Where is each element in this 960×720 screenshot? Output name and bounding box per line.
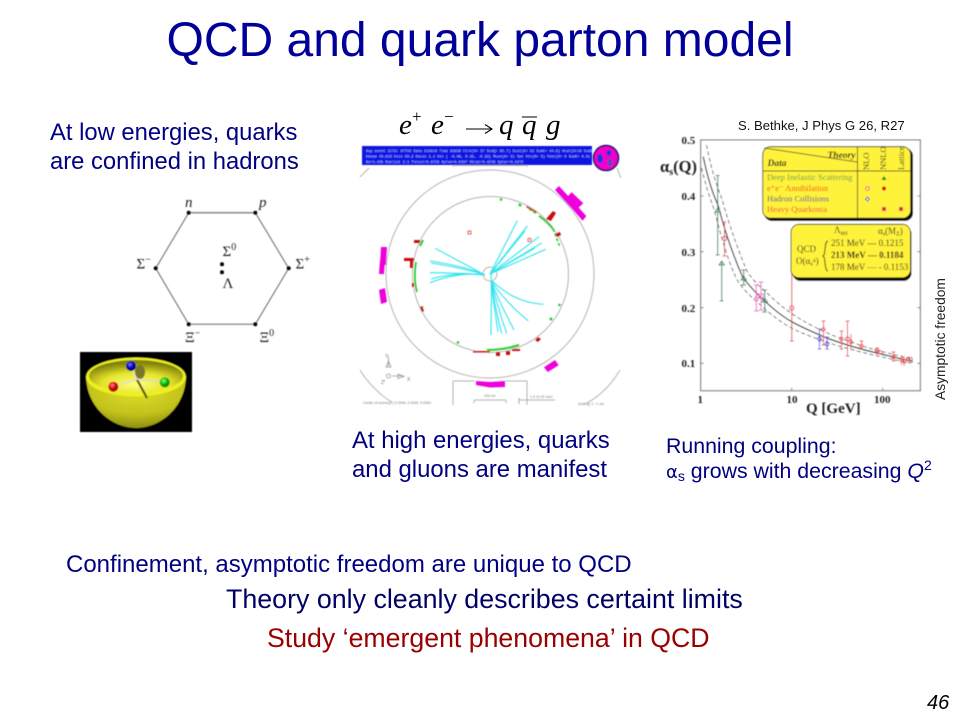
formula: e+ e- to q qbar g: + xyxy=(412,107,422,126)
chart: running coupling alpha_s(Q) xyxy=(660,135,920,417)
legend: QCD scale values: Λ xyxy=(834,225,841,235)
chart: collider event display: Scaling: 1 : 1 cm xyxy=(578,402,604,406)
formula: e+ e- to q qbar g xyxy=(399,107,560,141)
text: running coupling: α xyxy=(666,462,678,483)
event header bar: Ebeam 45.613 Evis 90.3 Emiss 1.1 Vtx ( -0.06, 0.15, -0.33) Muon(N= 0) Sec Vtx(N= 3) Fdet(N= 0 SumE= 0.0) xyxy=(366,154,590,160)
text: high energies: At high energies, quarks xyxy=(352,427,610,454)
page number: 46 xyxy=(927,692,950,714)
chart: collider event display: X xyxy=(407,377,411,383)
legend: QCD scale values: ) xyxy=(900,226,903,236)
chart: collider event display: 1 5 10 20 GeV xyxy=(530,395,553,399)
legend: data and theory table: NLO xyxy=(861,153,871,170)
stray cluster markers xyxy=(468,231,531,242)
title: QCD and quark parton model xyxy=(166,14,794,67)
legend: data and theory table: Hadron Collisions xyxy=(767,194,829,204)
legend: data and theory table: Theory xyxy=(828,151,856,161)
chart: collider event display: Z xyxy=(381,380,384,386)
diagram: baryon octet hexagon: Ξ xyxy=(185,330,195,346)
data points with error bars xyxy=(715,176,912,366)
legend: data and theory table: NNLO xyxy=(878,146,888,170)
x axis labels: 100 xyxy=(874,394,891,406)
text: running coupling xyxy=(666,434,932,484)
formula: e+ e- to q qbar g: q xyxy=(522,109,536,141)
chart: collider event display xyxy=(360,146,621,406)
formula: e+ e- to q qbar g: − xyxy=(444,107,454,126)
detector rings xyxy=(360,166,621,405)
diagram: baryon octet hexagon: Σ xyxy=(136,256,145,272)
legend: data and theory table: Data xyxy=(766,159,787,169)
text: high energies xyxy=(352,427,610,483)
legend: QCD scale values: ) xyxy=(816,256,819,266)
plot frame xyxy=(701,140,920,391)
diagram: baryon octet hexagon: n xyxy=(185,195,192,211)
diagram: baryon octet hexagon: 0 xyxy=(231,242,236,253)
diagram: baryon octet hexagon: 0 xyxy=(269,328,274,339)
inner hits green and red xyxy=(415,199,560,350)
formula: e+ e- to q qbar g: q xyxy=(499,109,514,141)
diagram: baryon octet hexagon: Λ xyxy=(222,276,234,292)
text: asymptotic freedom vertical label: Asymptotic freedom xyxy=(933,278,948,400)
tracks xyxy=(430,221,546,335)
text: low energies: are confined in hadrons xyxy=(50,148,299,175)
legend: data and theory table: Deep Inelastic Scattering xyxy=(767,172,853,182)
legend: QCD scale values: QCD xyxy=(797,244,817,254)
text: running coupling: 2 xyxy=(924,457,932,473)
y axis title: (Q) xyxy=(673,157,697,176)
legend: QCD scale values: MS xyxy=(841,232,848,237)
legend: data and theory table: Heavy Quarkonia xyxy=(767,204,827,214)
event header bar xyxy=(362,146,605,165)
event header bar: Aup event 2173: 67792 Date 910819 Time 93838 Ctrk(N= 37 SumQ= 65.7) Ecal(N= 55 SumE= 44.9) Hcal(N=19 SumE= 4.4) xyxy=(366,149,605,154)
diagram: baryon octet hexagon: − xyxy=(145,254,151,266)
x axis labels: 10 xyxy=(786,394,798,406)
y axis labels: 0.1 xyxy=(682,358,695,370)
y axis title: α xyxy=(660,157,669,176)
citation: S. Bethke, J Phys G 26, R27 xyxy=(738,118,905,133)
y axis labels: 0.2 xyxy=(682,303,696,315)
x axis labels: 1 xyxy=(698,394,703,406)
legend: QCD scale values: 4 xyxy=(813,258,816,264)
diagram: baryon octet hexagon: Σ xyxy=(222,244,231,260)
diagram: baryon octet hexagon: Ξ xyxy=(260,330,269,346)
y axis title: s xyxy=(669,167,673,178)
text: high energies: and gluons are manifest xyxy=(352,456,607,483)
legend: QCD scale values: s xyxy=(883,232,886,238)
legend: data and theory table: e⁺e⁻ Annihilation xyxy=(767,183,829,193)
legend: QCD scale values: 213 MeV — 0.1184 xyxy=(831,250,904,260)
diagram: baryon octet hexagon: + xyxy=(304,254,310,266)
detector logo xyxy=(594,146,618,170)
legend: QCD scale values: 251 MeV --- 0.1215 xyxy=(831,238,904,248)
x axis title: Q [GeV] xyxy=(806,401,861,417)
formula: e+ e- to q qbar g: g xyxy=(546,109,560,141)
x axis labels xyxy=(698,394,891,406)
legend: data and theory table xyxy=(763,146,913,221)
text: running coupling: s xyxy=(678,468,685,484)
legend: QCD scale values: s xyxy=(810,262,813,268)
diagram: baryon octet hexagon: p xyxy=(258,195,267,211)
chart: collider event display: Centre of screen(z.) 0.0000, 0.0000, 0.0000 xyxy=(363,401,431,405)
legend: QCD scale values: 178 MeV — - 0.1153 xyxy=(831,262,909,272)
text: running coupling: grows with decreasing xyxy=(685,459,907,483)
text: confinement statement: Confinement, asymptotic freedom are unique to QCD xyxy=(66,551,632,578)
legend: QCD scale values: α xyxy=(878,226,883,236)
text: emergent phenomena: Study ‘emergent phenomena’ in QCD xyxy=(267,623,710,653)
y axis labels xyxy=(682,135,696,370)
text: low energies: At low energies, quarks xyxy=(50,119,297,146)
axes legend xyxy=(384,356,555,404)
formula: e+ e- to q qbar g: e xyxy=(399,109,412,141)
calorimeter hits magenta xyxy=(379,186,586,388)
diagram: baryon octet hexagon: − xyxy=(195,328,201,339)
diagram: baryon octet hexagon xyxy=(136,195,310,346)
icon: yellow bag with three quarks xyxy=(80,352,192,432)
formula: e+ e- to q qbar g: e xyxy=(431,109,444,141)
event header bar: Bz=4.435 Runlist 1:1 Thrust=0.8756 Aplan=0.0397 Oblat=0.4246 Spher=0.3272 xyxy=(366,160,523,165)
text: running coupling: Running coupling: xyxy=(666,434,836,458)
legend: QCD scale values: Z xyxy=(896,232,900,238)
chart: collider event display: Y xyxy=(385,354,389,360)
y axis labels: 0.3 xyxy=(682,247,696,259)
text: low energies xyxy=(50,119,299,175)
curves xyxy=(702,145,913,364)
diagram: baryon octet hexagon: Σ xyxy=(296,256,304,272)
legend: QCD scale values: (M xyxy=(885,226,896,236)
text: theory limits: Theory only cleanly describes certaint limits xyxy=(226,584,743,614)
y axis labels: 0.4 xyxy=(682,191,696,203)
legend: data and theory table: Lattice xyxy=(896,146,906,170)
y axis labels: 0.5 xyxy=(682,135,696,147)
legend: QCD scale values xyxy=(791,224,912,281)
text: running coupling: Q xyxy=(907,459,924,483)
chart: collider event display: 100 cm. xyxy=(484,394,496,398)
legend: QCD scale values: O(α xyxy=(796,256,810,266)
